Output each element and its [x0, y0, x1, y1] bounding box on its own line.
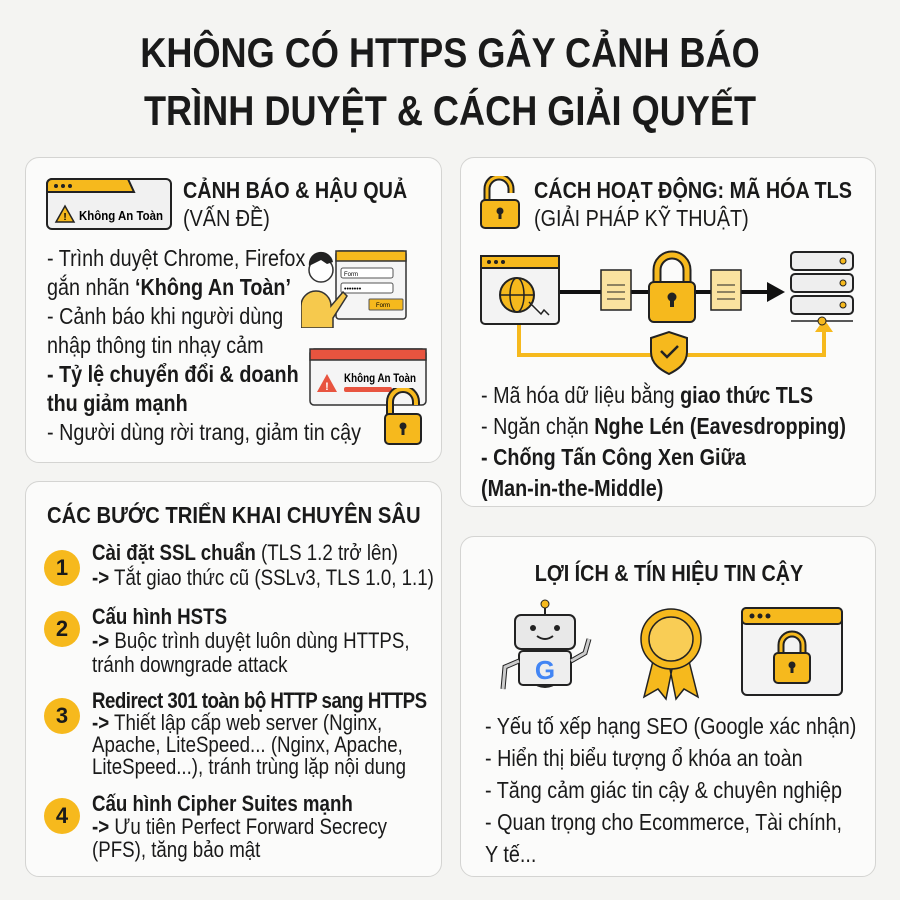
text block: - Hiển thị biểu tượng ổ khóa an toàn [485, 745, 803, 771]
icon: browser warning: Không An Toàn [79, 208, 163, 223]
text block: - Yếu tố xếp hạng SEO (Google xác nhận) [485, 713, 856, 739]
icon: award ribbon [640, 608, 702, 701]
text block: - Quan trọng cho Ecommerce, Tài chính, [485, 809, 842, 835]
icon: secure browser [741, 607, 843, 696]
icon: person with form [301, 250, 407, 328]
icon: person with form: Form [344, 272, 358, 278]
text block: Y tế... [485, 841, 536, 867]
icon: person with form: Form [376, 303, 390, 309]
icon: browser warning: ! [63, 212, 67, 223]
text block: - Cảnh báo khi người dùng [47, 303, 283, 329]
heading: CẢNH BÁO & HẬU QUẢ [183, 177, 407, 203]
step 2: tránh downgrade attack [92, 652, 287, 677]
step 3 [44, 688, 427, 779]
heading: (GIẢI PHÁP KỸ THUẬT) [534, 205, 749, 231]
step 2: Cấu hình HSTS [92, 604, 227, 629]
step 3: LiteSpeed...), tránh trùng lặp nội dung [92, 754, 406, 779]
icon: browser warning [46, 178, 172, 230]
heading [183, 177, 407, 231]
step 2 [44, 604, 410, 677]
step 4 [44, 791, 387, 862]
heading: LỢI ÍCH & TÍN HIỆU TIN CẬY [535, 560, 803, 586]
icon: red warning window: ! [325, 381, 329, 393]
step 4: 4 [56, 803, 68, 828]
text block: - Trình duyệt Chrome, Firefox [47, 245, 305, 271]
text block: gắn nhãn ‘Không An Toàn’ [47, 274, 291, 300]
step 3: -> Thiết lập cấp web server (Nginx, [92, 710, 382, 735]
step 1: Cài đặt SSL chuẩn (TLS 1.2 trở lên) [92, 540, 398, 565]
step 2: -> Buộc trình duyệt luôn dùng HTTPS, [92, 628, 410, 653]
panel: deployment steps [25, 481, 442, 877]
step 1 [44, 540, 434, 590]
icon: google robot [500, 600, 592, 690]
title [140, 29, 760, 134]
step 4: Cấu hình Cipher Suites mạnh [92, 791, 353, 816]
heading [534, 177, 852, 231]
panel: how TLS works [460, 157, 876, 507]
title: TRÌNH DUYỆT & CÁCH GIẢI QUYẾT [144, 87, 756, 134]
icon: person with form: ••••••• [344, 286, 362, 293]
text block [47, 245, 361, 445]
icon: red warning window [309, 348, 427, 406]
text block: - Chống Tấn Công Xen Giữa [481, 444, 746, 470]
text block: thu giảm mạnh [47, 390, 188, 416]
icon: google robot: G [535, 655, 555, 685]
step 4: -> Ưu tiên Perfect Forward Secrecy [92, 814, 387, 839]
text block [481, 382, 846, 501]
text block: - Mã hóa dữ liệu bằng giao thức TLS [481, 382, 813, 408]
text block [485, 713, 856, 867]
icon: padlock [480, 176, 520, 229]
icon: open padlock [384, 388, 422, 445]
panel: benefits & trust signals [460, 536, 876, 877]
step 3: Apache, LiteSpeed... (Nginx, Apache, [92, 732, 403, 757]
title: KHÔNG CÓ HTTPS GÂY CẢNH BÁO [140, 29, 760, 76]
text block: - Tăng cảm giác tin cậy & chuyên nghiệp [485, 777, 842, 803]
text block: - Tỷ lệ chuyển đổi & doanh [47, 361, 299, 387]
step 2: 2 [56, 616, 68, 641]
heading: (VẤN ĐỀ) [183, 205, 270, 231]
heading: CÁC BƯỚC TRIỂN KHAI CHUYÊN SÂU [47, 502, 421, 528]
heading: CÁCH HOẠT ĐỘNG: MÃ HÓA TLS [534, 177, 852, 203]
step 3: 3 [56, 703, 68, 728]
step 1: -> Tắt giao thức cũ (SSLv3, TLS 1.0, 1.1) [92, 565, 434, 590]
text block: (Man-in-the-Middle) [481, 475, 663, 501]
text block: - Ngăn chặn Nghe Lén (Eavesdropping) [481, 413, 846, 439]
step 4: (PFS), tăng bảo mật [92, 837, 260, 862]
step 3: Redirect 301 toàn bộ HTTP sang HTTPS [92, 688, 427, 713]
diagram: TLS flow [480, 250, 854, 375]
text block: nhập thông tin nhạy cảm [47, 332, 264, 358]
text block: - Người dùng rời trang, giảm tin cậy [47, 419, 361, 445]
step 1: 1 [56, 555, 68, 580]
panel: warnings & consequences [25, 157, 442, 463]
